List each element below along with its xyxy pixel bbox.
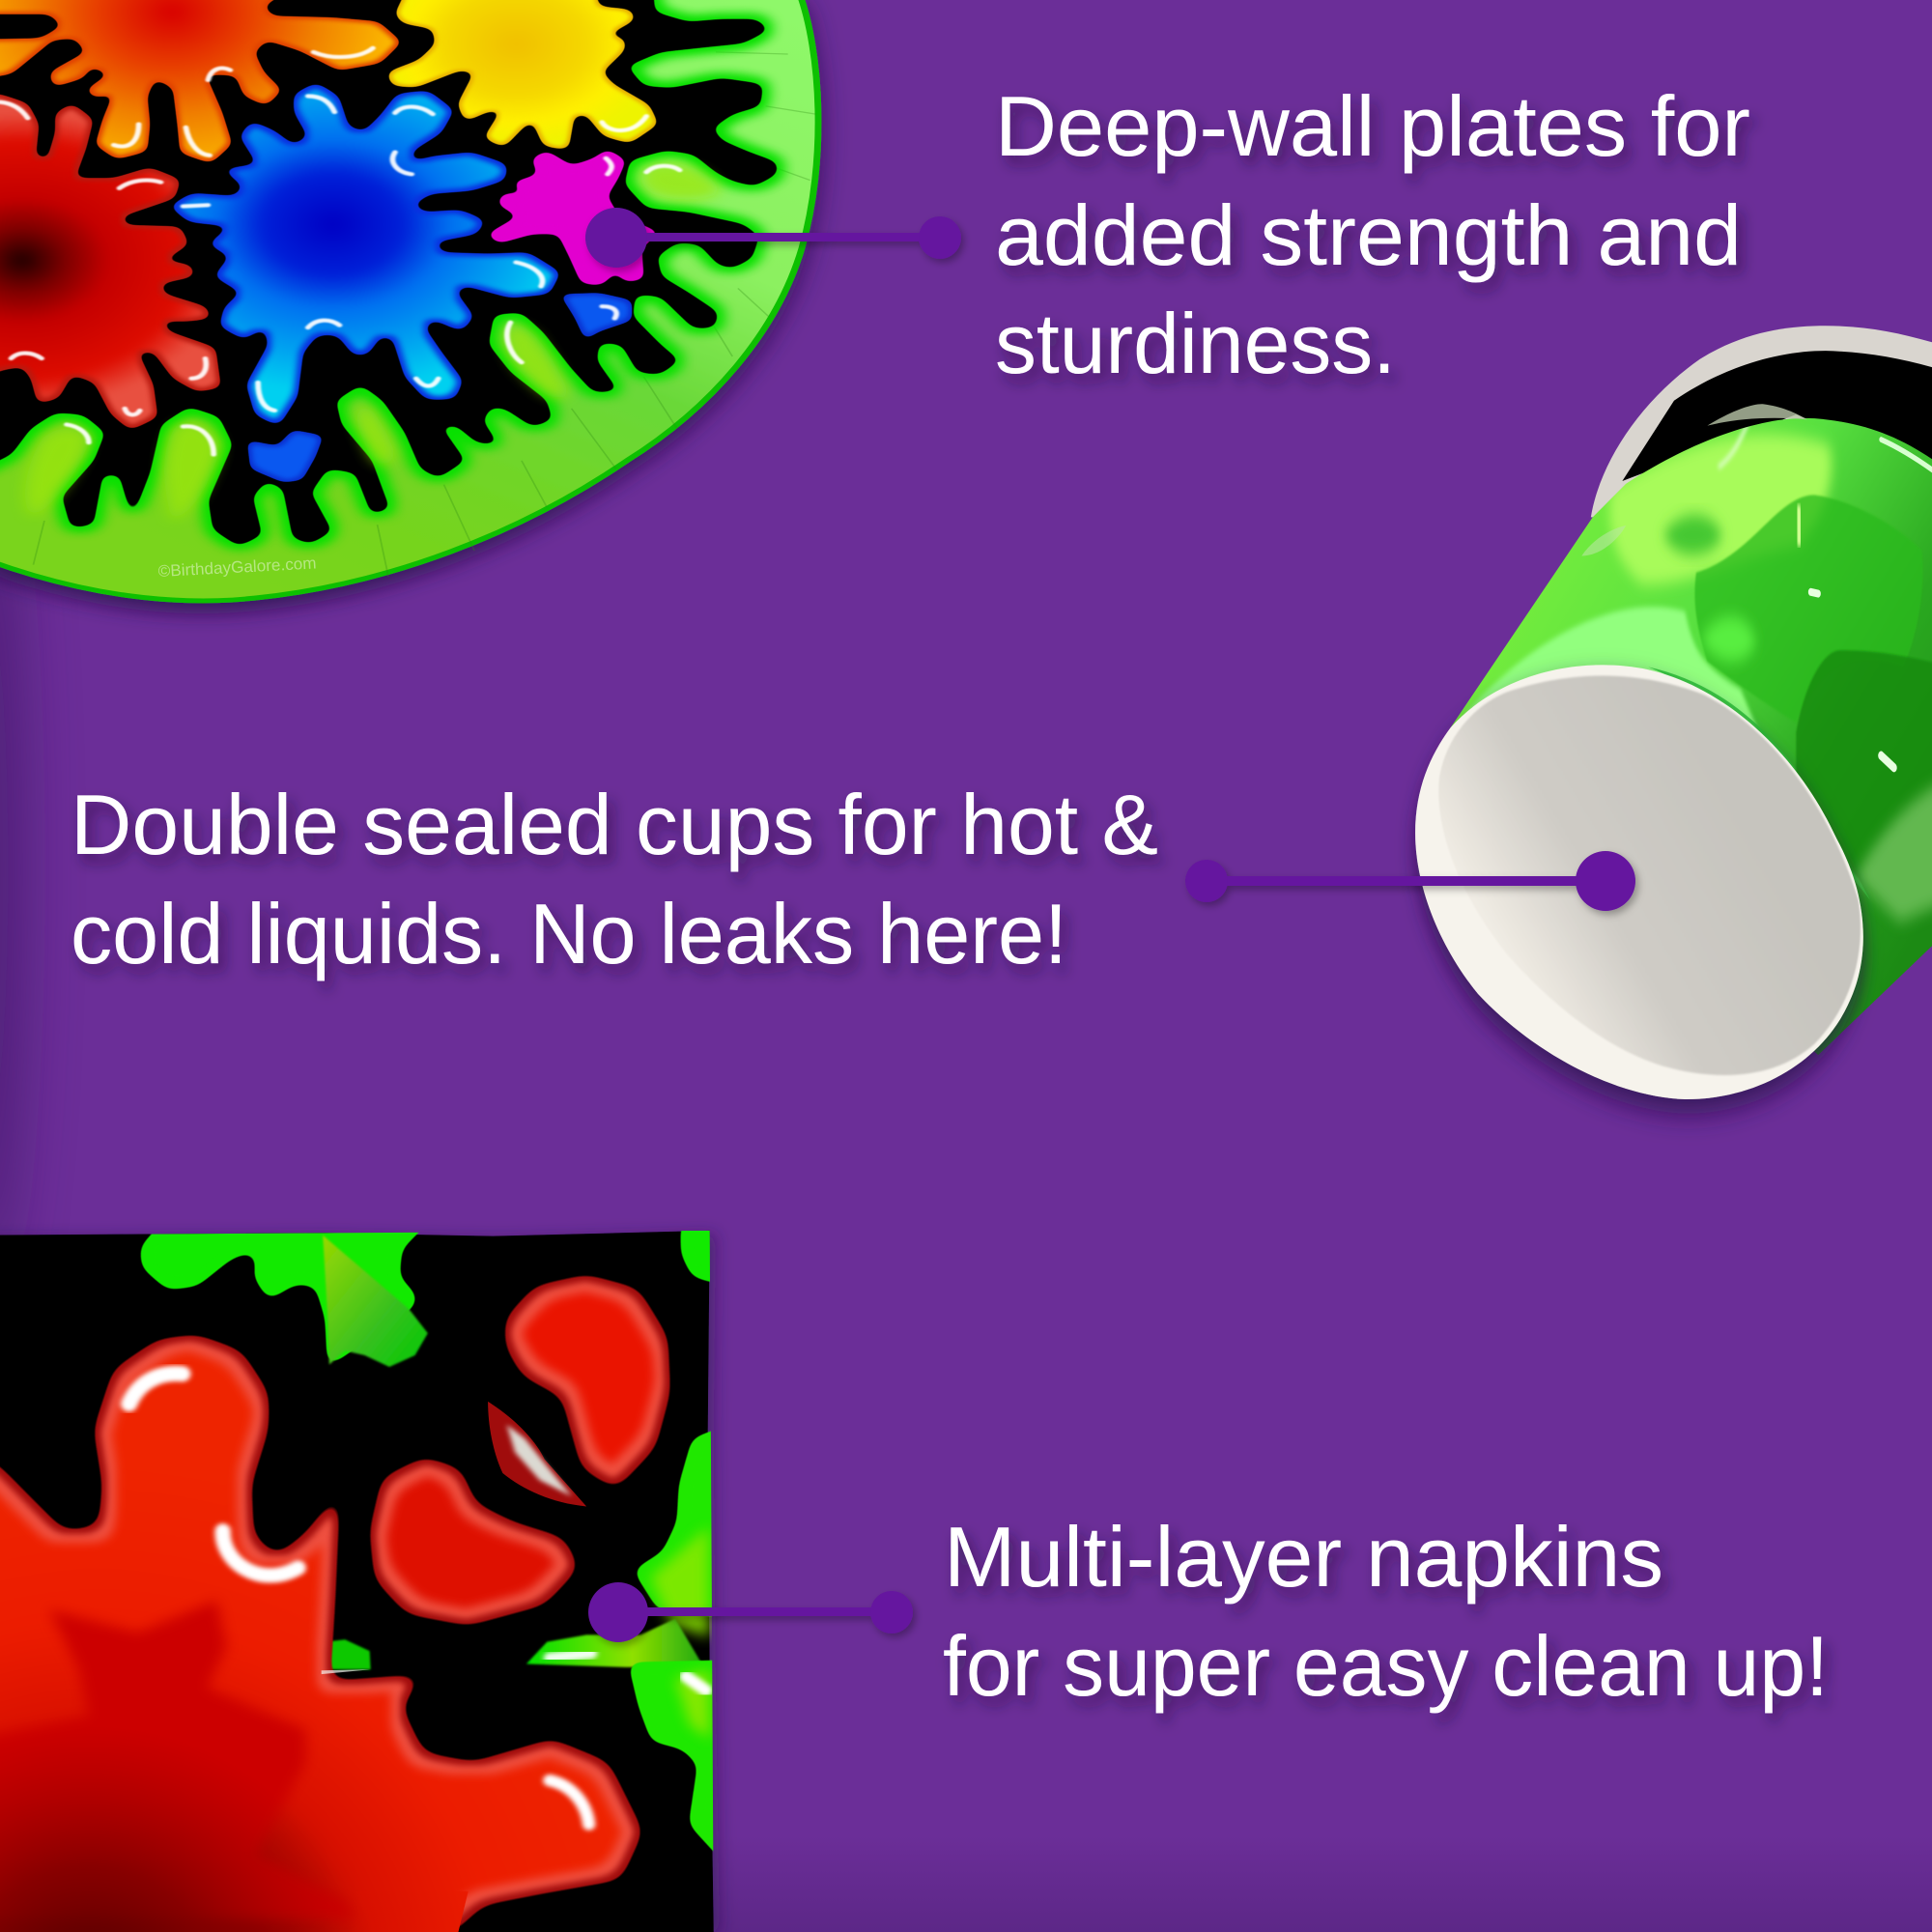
- cup interior: [1622, 351, 1932, 481]
- text: plates: added strength and: [995, 187, 1742, 283]
- red drops: [370, 1274, 670, 1626]
- orange splat: [0, 0, 402, 163]
- panel: napkin: [0, 1217, 729, 1932]
- big red splat: [0, 1335, 643, 1932]
- text: napkins: [943, 1509, 1829, 1714]
- watermark: ©BirthdayGalore.com: [157, 554, 317, 581]
- text: cups: [71, 777, 1158, 981]
- blue splat: [170, 82, 560, 426]
- lime drip centres: [25, 162, 720, 521]
- plate rim: [0, 0, 818, 601]
- small blue drops: [247, 293, 632, 482]
- text: napkins: Multi-layer napkins: [944, 1509, 1663, 1605]
- cup base: [1415, 665, 1863, 1099]
- yellow splat: [387, 0, 658, 150]
- connector: plate: [585, 208, 961, 268]
- red splat: [0, 94, 221, 430]
- pink splat: [487, 149, 659, 285]
- panel: cup: [1415, 326, 1932, 1099]
- panel: plate: [0, 0, 818, 601]
- text: plates: sturdiness.: [995, 296, 1396, 391]
- green blobs: [140, 1217, 729, 1868]
- plate crease lines: [33, 52, 815, 577]
- text: napkins: for super easy clean up!: [943, 1618, 1829, 1714]
- napkin black square: [0, 1231, 714, 1932]
- connector: cup: [1185, 851, 1635, 911]
- text: cups: cold liquids. No leaks here!: [71, 886, 1067, 981]
- connector: napkin: [588, 1582, 913, 1642]
- highlights: [0, 48, 680, 455]
- black centre: [0, 0, 777, 547]
- cup body: [1450, 404, 1932, 1055]
- text: plates: Deep-wall plates for: [995, 78, 1750, 174]
- text: plates: [995, 78, 1750, 391]
- cup rim: [1591, 326, 1932, 523]
- text: cups: Double sealed cups for hot &: [71, 777, 1158, 872]
